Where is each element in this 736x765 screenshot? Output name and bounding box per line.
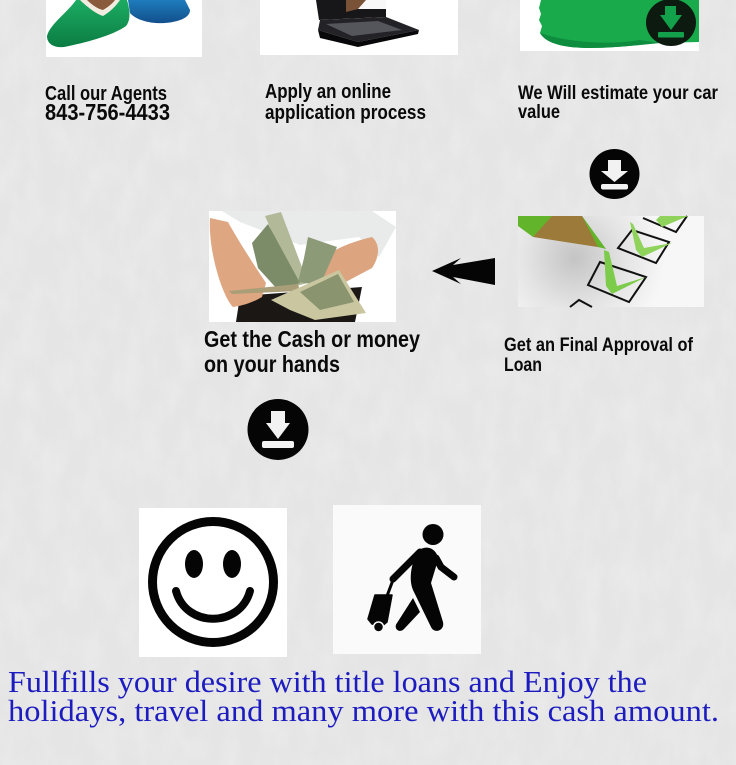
icon: traveller with suitcase — [333, 505, 481, 654]
step 3 text: value — [518, 102, 560, 123]
icon: download arrow centre — [248, 399, 308, 460]
photo: green hand — [520, 0, 699, 51]
step 1 text: 843-756-4433 — [45, 99, 170, 125]
photo: laptop — [260, 0, 458, 55]
step 2 text: Apply an online — [265, 81, 391, 103]
step 4 text: on your hands — [204, 351, 340, 377]
arrow: pointing left — [432, 258, 495, 285]
photo: agents — [46, 0, 202, 57]
closing message: holidays, travel and many more with this cash amount. — [8, 693, 719, 728]
step 3 text — [518, 83, 719, 123]
step 4 text: Get the Cash or money — [204, 326, 420, 352]
step 4 text — [204, 326, 420, 377]
icon: smiley face — [139, 508, 287, 657]
step 2 text — [265, 81, 426, 124]
photo: hands holding cash — [209, 211, 396, 322]
step 2 text: application process — [265, 102, 426, 124]
step 1 text — [45, 83, 170, 125]
closing message — [8, 664, 719, 728]
icon: download arrow right — [590, 149, 640, 199]
step 5 text — [504, 335, 694, 376]
step 1 text: Call our Agents — [45, 83, 167, 105]
closing message: Fullfills your desire with title loans and Enjoy the — [8, 664, 647, 699]
step 5 text: Get an Final Approval of — [504, 335, 694, 356]
photo: checklist — [518, 216, 704, 307]
icon: download on green hand — [646, 0, 696, 46]
step 5 text: Loan — [504, 355, 542, 376]
